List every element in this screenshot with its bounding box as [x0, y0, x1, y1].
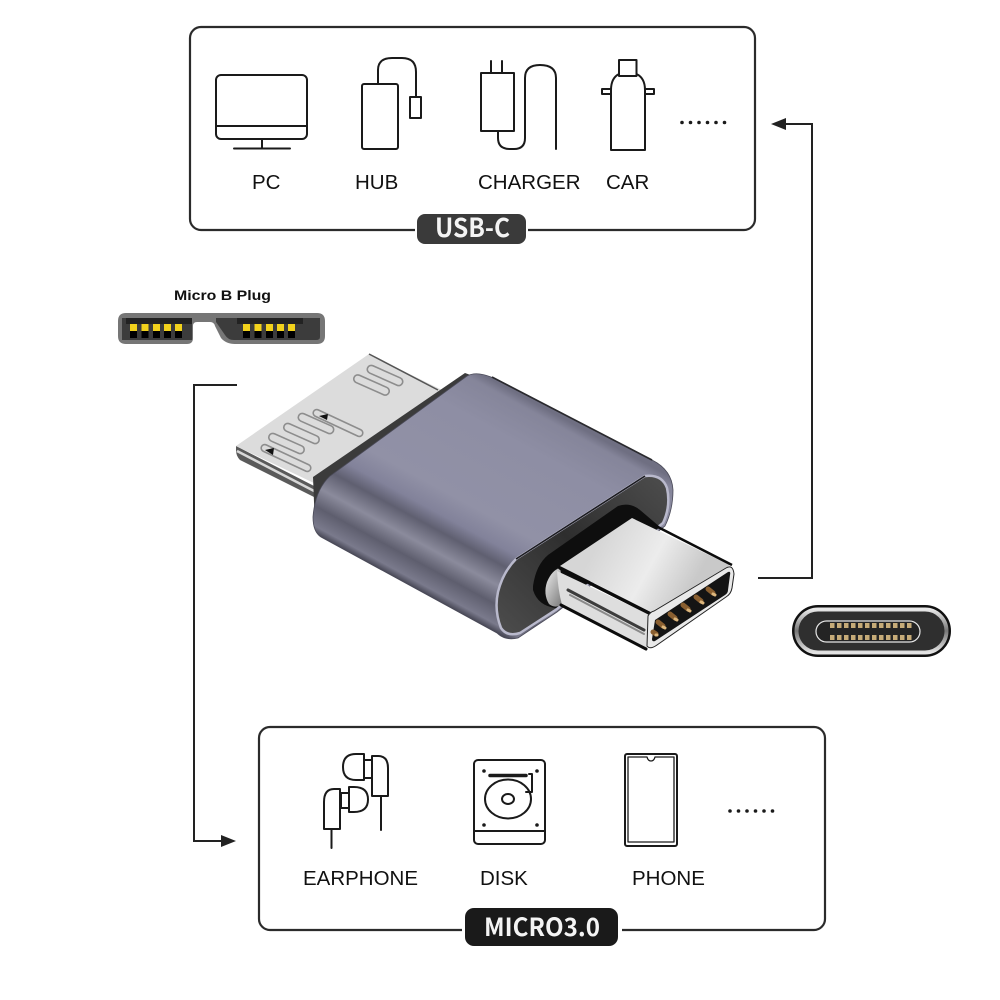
- micro B plug diagram: [118, 287, 325, 344]
- collar between plug and body: [313, 373, 476, 527]
- panel: Micro 3.0 devices: [259, 727, 825, 946]
- icon: charger: [481, 61, 556, 149]
- label: PC: PC: [252, 171, 281, 194]
- receptacle tongue: [816, 621, 920, 642]
- USB-C plug side stripes: [560, 568, 651, 649]
- micro plug edge: [369, 354, 438, 390]
- micro plug plate: [236, 354, 442, 484]
- icon: PC monitor: [216, 75, 307, 148]
- arrow: USB-C to panel: [758, 118, 812, 578]
- USB-C receptacle front view: [793, 606, 950, 656]
- micro plug metal side: [236, 446, 316, 498]
- label: CAR: CAR: [606, 171, 649, 194]
- aluminium body: [313, 374, 673, 639]
- label: PHONE: PHONE: [632, 867, 705, 890]
- label: DISK: DISK: [480, 867, 528, 890]
- label: HUB: HUB: [355, 171, 398, 194]
- panel: USB-C devices: [190, 27, 755, 245]
- body top edge shadow: [492, 377, 652, 460]
- USB-C plug opening: [652, 572, 730, 641]
- label: CHARGER: CHARGER: [478, 171, 581, 194]
- connector outline: [118, 313, 325, 344]
- connector left cavity: [122, 318, 192, 340]
- tag: USB-C: USB-C: [435, 208, 510, 245]
- arrow: Micro plug to panel: [194, 385, 237, 847]
- label: EARPHONE: EARPHONE: [303, 867, 418, 890]
- micro plug side highlight: [237, 451, 316, 492]
- USB-C gold contacts: [653, 589, 715, 635]
- icon: phone: [625, 754, 677, 846]
- heading: Micro B Plug: Micro B Plug: [174, 287, 271, 303]
- USB-C plug boot: [533, 505, 660, 608]
- connector right cavity: [216, 318, 320, 340]
- USB-C plug top edge: [650, 523, 732, 565]
- USB-C plug side shell: [557, 571, 650, 648]
- adapter illustration: [236, 354, 734, 649]
- icon: disk: [474, 760, 545, 844]
- panel border: [190, 27, 755, 230]
- USB-C plug neck: [545, 568, 566, 607]
- body end top edge: [516, 476, 645, 559]
- panel border: [259, 727, 825, 930]
- icon: more dots: [728, 809, 774, 813]
- receptacle metal rim: [796, 610, 946, 652]
- USB-C plug top plate: [560, 518, 730, 612]
- micro plug slots: [260, 364, 404, 473]
- icon: car charger: [602, 60, 654, 150]
- tag: MICRO3.0: MICRO3.0: [484, 908, 600, 944]
- receptacle pins: [830, 623, 912, 640]
- icon: more dots: [680, 121, 726, 124]
- body end cap: [497, 476, 668, 634]
- USB-C plug front shell: [647, 567, 734, 648]
- receptacle outer shell: [793, 606, 950, 656]
- icon: earphones: [324, 754, 388, 848]
- contacts: [126, 318, 303, 338]
- icon: hub: [362, 58, 421, 149]
